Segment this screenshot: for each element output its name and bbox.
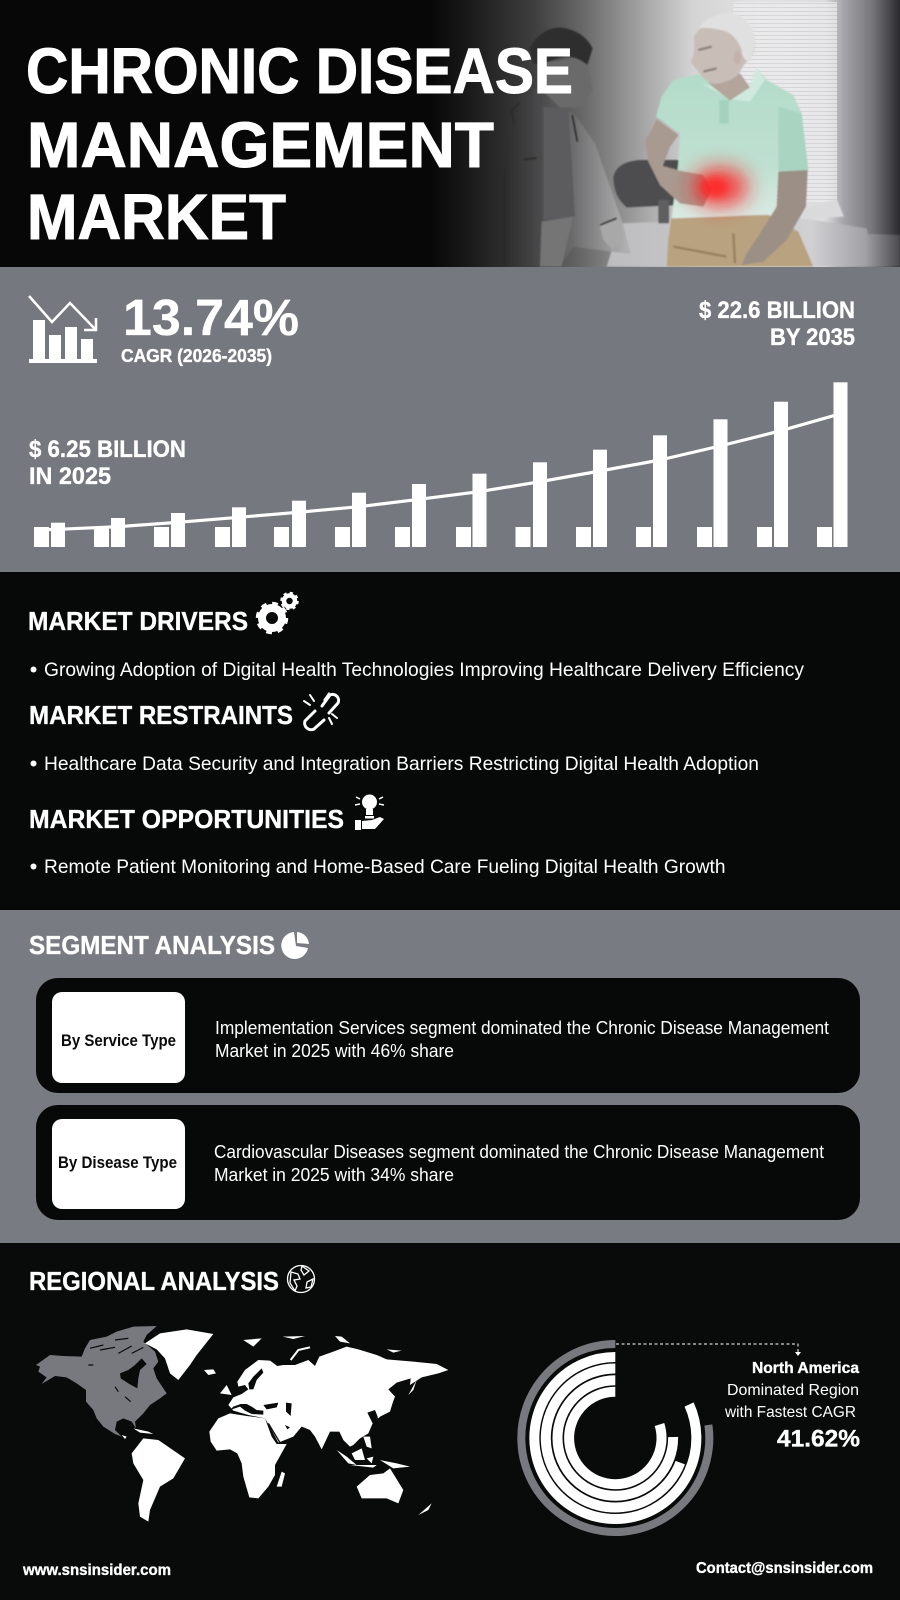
- callout: north america: with Fastest CAGR: [724, 1404, 856, 1421]
- value 2025: $ 6.25 BILLION: [29, 436, 186, 463]
- title: CHRONIC DISEASE: [26, 35, 573, 107]
- patient pants: [667, 215, 813, 267]
- opportunity text: Remote Patient Monitoring and Home-Based Care Fueling Digital Health Growth: [44, 856, 726, 878]
- card: by service type: By Service Type: [61, 1032, 176, 1050]
- value 2025: IN 2025: [29, 463, 111, 490]
- value 2035: [699, 297, 855, 351]
- doctor coat: [503, 87, 631, 267]
- icon: broken link: [304, 693, 339, 730]
- heading: market opportunities: MARKET OPPORTUNITIES: [29, 804, 344, 834]
- callout: north america: Dominated Region: [727, 1382, 859, 1399]
- driver text: Growing Adoption of Digital Health Technologies Improving Healthcare Delivery Efficiency: [44, 659, 804, 681]
- card: by service type: Implementation Services segment dominated the Chronic Disease Management: [215, 1018, 829, 1038]
- inland seas: [230, 1368, 292, 1443]
- doctor hair: [529, 27, 593, 65]
- other continents: [122, 1329, 448, 1522]
- bar chart: [34, 382, 848, 547]
- patient face: [691, 15, 755, 84]
- callout: north america: 41.62%: [777, 1426, 860, 1452]
- title: MANAGEMENT: [27, 109, 494, 181]
- bottle: [658, 200, 669, 223]
- icon: lightbulb in hand: [355, 794, 384, 830]
- heading: market drivers: MARKET DRIVERS: [28, 606, 248, 636]
- dashed leader arrow: [616, 1344, 801, 1356]
- card: by service type: Market in 2025 with 46% share: [215, 1041, 454, 1061]
- card: by service type: [36, 978, 860, 1093]
- heading: market restraints: MARKET RESTRAINTS: [29, 700, 293, 730]
- doctor face: [538, 57, 593, 107]
- heading: regional analysis: REGIONAL ANALYSIS: [29, 1266, 279, 1296]
- patient shirt: [656, 68, 808, 218]
- card: by disease type: By Disease Type: [58, 1154, 177, 1172]
- trend line: [34, 415, 836, 530]
- panel: segment analysis: [0, 910, 900, 1243]
- radial chart: [521, 1344, 709, 1532]
- icon: pie chart: [281, 932, 309, 959]
- panel: market size: [0, 267, 900, 572]
- icon: globe: [288, 1266, 314, 1292]
- world map: [36, 1326, 448, 1522]
- callout: north america: [724, 1360, 860, 1452]
- value 2035: BY 2035: [770, 324, 855, 351]
- value 2025: [29, 436, 186, 490]
- header photo: doctor and patient: [430, 0, 900, 267]
- footer contact: Contact@snsinsider.com: [696, 1560, 873, 1577]
- patient hair: [698, 13, 755, 62]
- icon: chart with arrow: [29, 296, 97, 363]
- panel: regional analysis: [0, 1243, 900, 1600]
- patient neck: [707, 73, 750, 101]
- patient left arm: [645, 119, 712, 207]
- CAGR value: 13.74%: [123, 289, 299, 346]
- callout: north america: North America: [752, 1360, 859, 1377]
- title: [26, 35, 573, 253]
- value 2035: $ 22.6 BILLION: [699, 297, 855, 324]
- chair: [613, 160, 680, 207]
- restraint text: Healthcare Data Security and Integration Barriers Restricting Digital Health Adoption: [44, 753, 759, 775]
- title: MARKET: [27, 181, 286, 253]
- footer website: www.snsinsider.com: [22, 1562, 171, 1579]
- CAGR label: CAGR (2026-2035): [121, 346, 272, 366]
- panel: drivers, restraints, opportunities: [0, 572, 900, 910]
- card: by disease type: Cardiovascular Diseases segment dominated the Chronic Disease Management: [214, 1142, 824, 1162]
- North America (highlighted): [36, 1326, 167, 1437]
- header banner: [0, 0, 900, 267]
- icon: gears: [258, 593, 298, 632]
- bed: [607, 217, 900, 267]
- card: by disease type: [36, 1105, 860, 1220]
- patient right arm: [742, 170, 808, 265]
- card: by disease type: Market in 2025 with 34% share: [214, 1165, 454, 1185]
- heading: segment analysis: SEGMENT ANALYSIS: [29, 930, 275, 960]
- collar: [702, 68, 765, 102]
